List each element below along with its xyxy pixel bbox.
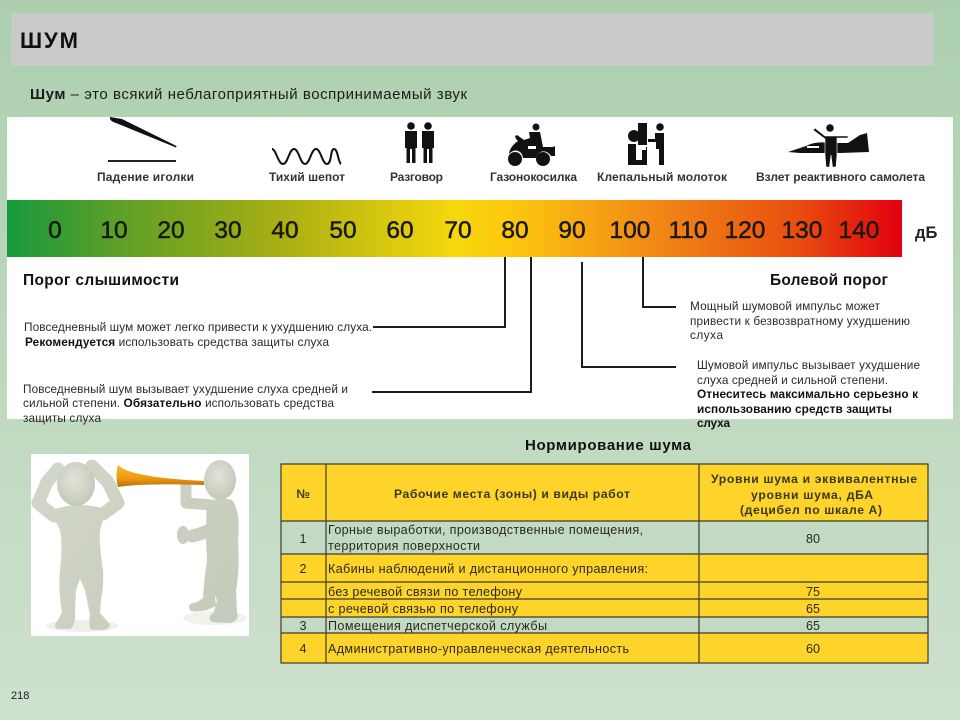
icon: two people talking bbox=[405, 122, 434, 163]
row 1 bbox=[299, 523, 820, 553]
left figure bbox=[38, 462, 118, 630]
text: 90 dB note: слуха bbox=[697, 416, 730, 430]
title: ШУМ bbox=[20, 28, 78, 53]
text: 85 dB note bbox=[23, 382, 348, 425]
table: noise norms bbox=[281, 464, 928, 663]
icon: rivet hammer worker bbox=[628, 123, 664, 165]
row 1: 80 bbox=[806, 532, 820, 546]
row 2b: 65 bbox=[806, 602, 820, 616]
scale bar: 30 bbox=[214, 217, 242, 244]
row 1: территория поверхности bbox=[328, 539, 480, 553]
table header bbox=[296, 472, 917, 517]
row 2b: с речевой связью по телефону bbox=[328, 602, 519, 616]
text: 90 dB note: Отнеситесь максимально серьезно к bbox=[697, 387, 918, 401]
row 4: 60 bbox=[806, 642, 820, 656]
scale bar: 130 bbox=[782, 217, 822, 244]
scale bar: 0 bbox=[48, 217, 62, 244]
heading: hearing threshold: Порог слышимости bbox=[23, 272, 179, 289]
table header: уровни шума, дБА bbox=[751, 488, 873, 502]
text: 90 dB note: Шумовой импульс вызывает ухудшение bbox=[697, 358, 920, 372]
label: lawn mower: Газонокосилка bbox=[490, 170, 577, 184]
row 2a bbox=[328, 585, 820, 599]
text: 80 dB note: Рекомендуется использовать средства защиты слуха bbox=[25, 335, 329, 349]
table header: Рабочие места (зоны) и виды работ bbox=[394, 487, 630, 501]
illustration: two figures with horn bbox=[31, 454, 249, 636]
connector 80 dB bbox=[373, 257, 505, 327]
row 4: Административно-управленческая деятельность bbox=[328, 642, 629, 656]
panel: decibel scale bbox=[7, 117, 953, 430]
text: 100 dB note: слуха bbox=[690, 328, 723, 342]
row 1: Горные выработки, производственные помещения, bbox=[328, 523, 643, 537]
text: 100 dB note: привести к безвозвратному ухудшению bbox=[690, 314, 910, 328]
row 2b bbox=[328, 602, 820, 616]
scale bar: 10 bbox=[100, 217, 128, 244]
text: 90 dB note bbox=[697, 358, 920, 430]
scale bar: 90 bbox=[558, 217, 586, 244]
label: conversation: Разговор bbox=[390, 170, 443, 184]
label: jet takeoff: Взлет реактивного самолета bbox=[756, 170, 925, 184]
row 3: Помещения диспетчерской службы bbox=[328, 619, 547, 633]
table header: № bbox=[296, 487, 310, 501]
row 2: Кабины наблюдений и дистанционного управления: bbox=[328, 562, 648, 576]
scale bar: 110 bbox=[668, 217, 708, 244]
scale bar: 40 bbox=[271, 217, 299, 244]
row 3: 65 bbox=[806, 619, 820, 633]
text: 85 dB note: защиты слуха bbox=[23, 411, 101, 425]
scale bar: 80 bbox=[501, 217, 529, 244]
definition text: Шум – это всякий неблагоприятный воспринимаемый звук bbox=[30, 86, 467, 103]
row 2a: без речевой связи по телефону bbox=[328, 585, 523, 599]
title bar bbox=[11, 13, 934, 66]
right figure bbox=[177, 460, 239, 623]
horn bbox=[116, 465, 204, 487]
text: 90 dB note: использованию средств защиты bbox=[697, 402, 892, 416]
scale bar: 20 bbox=[157, 217, 185, 244]
text: 80 dB note bbox=[24, 320, 372, 349]
heading: pain threshold: Болевой порог bbox=[770, 272, 889, 289]
row 2a: 75 bbox=[806, 585, 820, 599]
label: rivet hammer: Клепальный молоток bbox=[597, 170, 728, 184]
scale bar: 70 bbox=[444, 217, 472, 244]
row 2: 2 bbox=[299, 562, 307, 576]
scale bar: 60 bbox=[386, 217, 414, 244]
table heading: Нормирование шума bbox=[525, 437, 692, 454]
row 3 bbox=[299, 619, 820, 633]
text: 85 dB note: Повседневный шум вызывает ухудшение слуха средней и bbox=[23, 382, 348, 396]
scale bar: 100 bbox=[610, 217, 650, 244]
scale bar: 50 bbox=[329, 217, 357, 244]
unit label: дБ bbox=[915, 224, 937, 242]
text: 90 dB note: слуха средней и сильной степени. bbox=[697, 373, 888, 387]
icon: whisper wave bbox=[272, 149, 341, 164]
text: 85 dB note: сильной степени. Обязательно использовать средства bbox=[23, 396, 334, 410]
connector 100 dB bbox=[643, 257, 676, 307]
label: needle: Падение иголки bbox=[97, 170, 194, 184]
page number: 218 bbox=[11, 690, 29, 702]
icon: jet and signaller bbox=[788, 124, 869, 167]
text: 80 dB note: Повседневный шум может легко привести к ухудшению слуха. bbox=[24, 320, 372, 334]
connector 85 dB bbox=[372, 257, 531, 392]
text: 100 dB note bbox=[690, 299, 910, 342]
row 1: 1 bbox=[299, 532, 307, 546]
icon: lawn mower bbox=[508, 124, 555, 166]
table header: (децибел по шкале А) bbox=[740, 503, 882, 517]
row 4 bbox=[299, 642, 820, 656]
row 4: 4 bbox=[299, 642, 307, 656]
scale bar: 120 bbox=[725, 217, 765, 244]
scale bar bbox=[7, 200, 902, 257]
text: 100 dB note: Мощный шумовой импульс может bbox=[690, 299, 881, 313]
icon: falling needle bbox=[108, 117, 176, 162]
row 3: 3 bbox=[299, 619, 307, 633]
scale bar: 140 bbox=[839, 217, 879, 244]
label: whisper: Тихий шепот bbox=[269, 170, 345, 184]
connector 90 dB bbox=[582, 262, 676, 367]
table header: Уровни шума и эквивалентные bbox=[711, 472, 917, 486]
